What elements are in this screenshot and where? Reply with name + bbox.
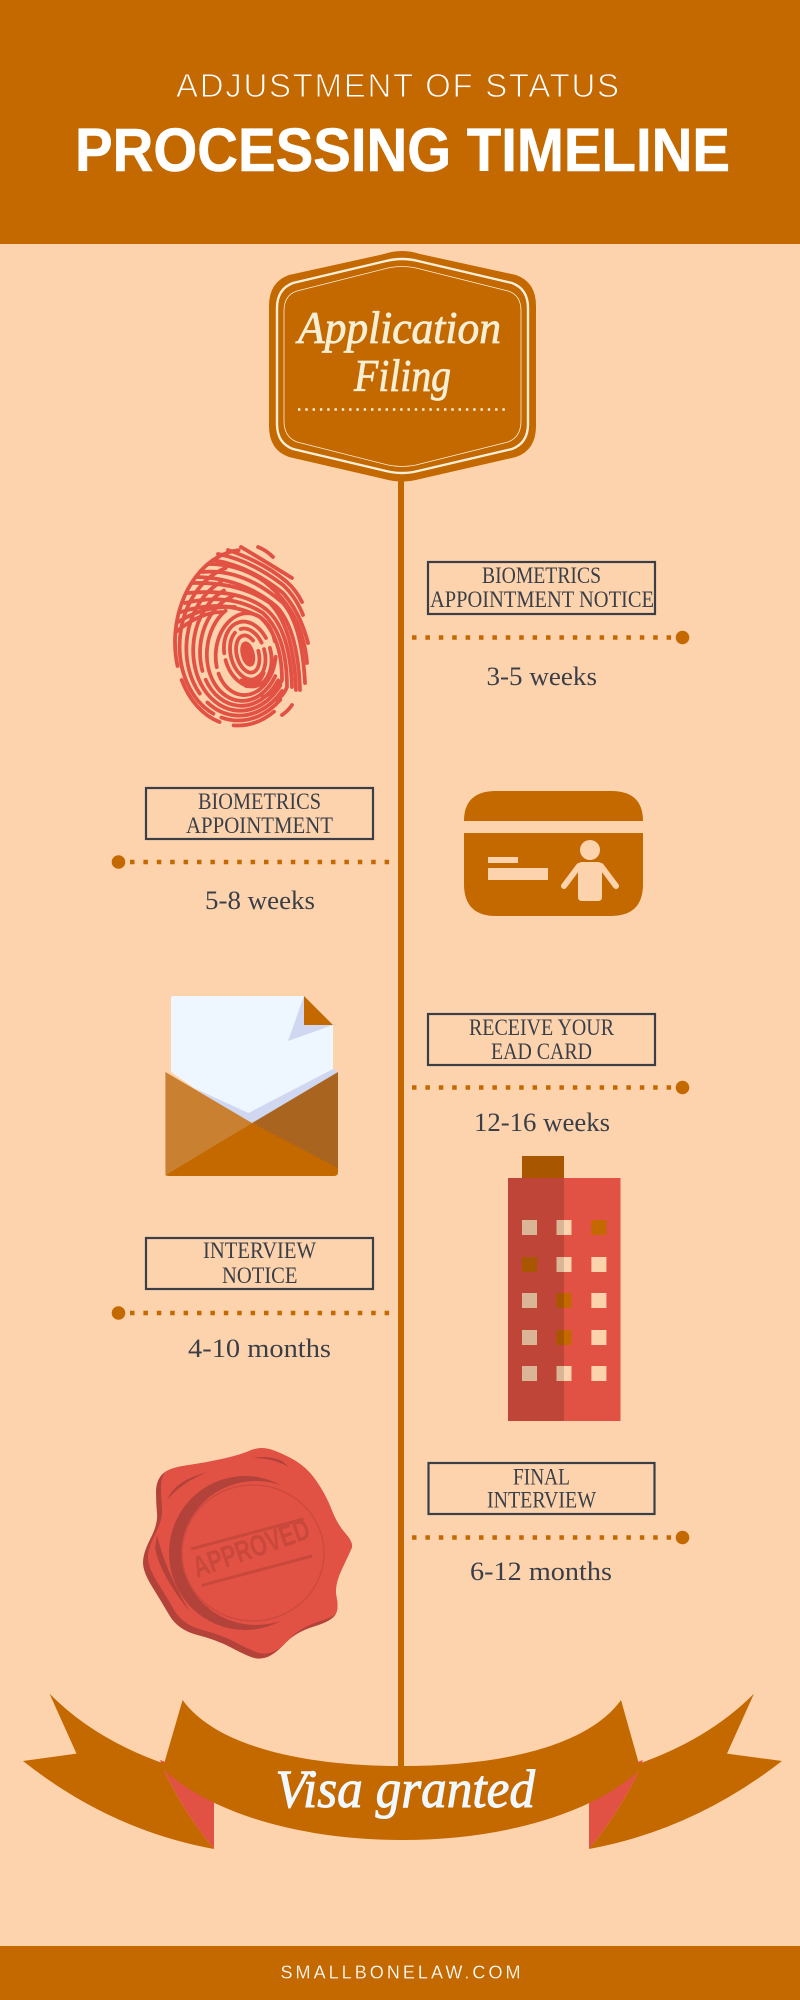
timeline vertical line bbox=[398, 470, 404, 1770]
badge: application filing bbox=[269, 251, 536, 482]
icon: building bbox=[508, 1156, 620, 1421]
ribbon text: Visa granted bbox=[276, 1759, 536, 1819]
ribbon: visa granted bbox=[23, 1694, 782, 1849]
badge text: Application bbox=[295, 303, 501, 353]
step 4: interview notice: NOTICE bbox=[222, 1263, 298, 1288]
badge: application filing: Filing bbox=[353, 351, 451, 401]
step 1: biometrics appointment notice: 3-5 weeks bbox=[486, 662, 597, 691]
windows bbox=[564, 1220, 606, 1381]
step 2: biometrics appointment: BIOMETRICS bbox=[198, 789, 321, 814]
step 3: receive your ead card bbox=[412, 1014, 689, 1137]
step 2: biometrics appointment: 5-8 weeks bbox=[205, 886, 315, 915]
icon: fingerprint bbox=[168, 544, 315, 731]
footer band bbox=[0, 1946, 800, 2000]
step 4: interview notice: 4-10 months bbox=[188, 1334, 331, 1363]
step 4: interview notice: INTERVIEW bbox=[203, 1238, 316, 1263]
step 3: receive your ead card: RECEIVE YOUR bbox=[469, 1015, 615, 1040]
icon: approved wax seal: APPROVED bbox=[188, 1513, 314, 1585]
seal stamp text bbox=[191, 1519, 304, 1549]
step 1: biometrics appointment notice: BIOMETRICS bbox=[482, 563, 601, 588]
step 5: final interview bbox=[412, 1463, 689, 1586]
step 2: biometrics appointment: APPOINTMENT bbox=[186, 813, 333, 838]
step 5: final interview: FINAL bbox=[513, 1464, 570, 1490]
header band bbox=[0, 0, 800, 244]
step 2: biometrics appointment bbox=[112, 788, 392, 915]
step 1: biometrics appointment notice bbox=[412, 562, 689, 691]
icon: id card bbox=[464, 791, 643, 916]
step 5: final interview: 6-12 months bbox=[470, 1557, 612, 1586]
step 1: biometrics appointment notice: APPOINTMENT NOTICE bbox=[430, 587, 654, 612]
step 3: receive your ead card: 12-16 weeks bbox=[474, 1108, 610, 1137]
title: PROCESSING TIMELINE bbox=[75, 116, 730, 184]
step 5: final interview: INTERVIEW bbox=[487, 1488, 596, 1512]
footer band: SMALLBONELAW.COM bbox=[280, 1962, 520, 1982]
step 4: interview notice bbox=[112, 1238, 392, 1363]
subtitle: ADJUSTMENT OF STATUS bbox=[176, 67, 619, 104]
icon: envelope with letter bbox=[165, 996, 338, 1176]
step 3: receive your ead card: EAD CARD bbox=[491, 1039, 592, 1064]
icon: approved wax seal bbox=[143, 1443, 357, 1659]
